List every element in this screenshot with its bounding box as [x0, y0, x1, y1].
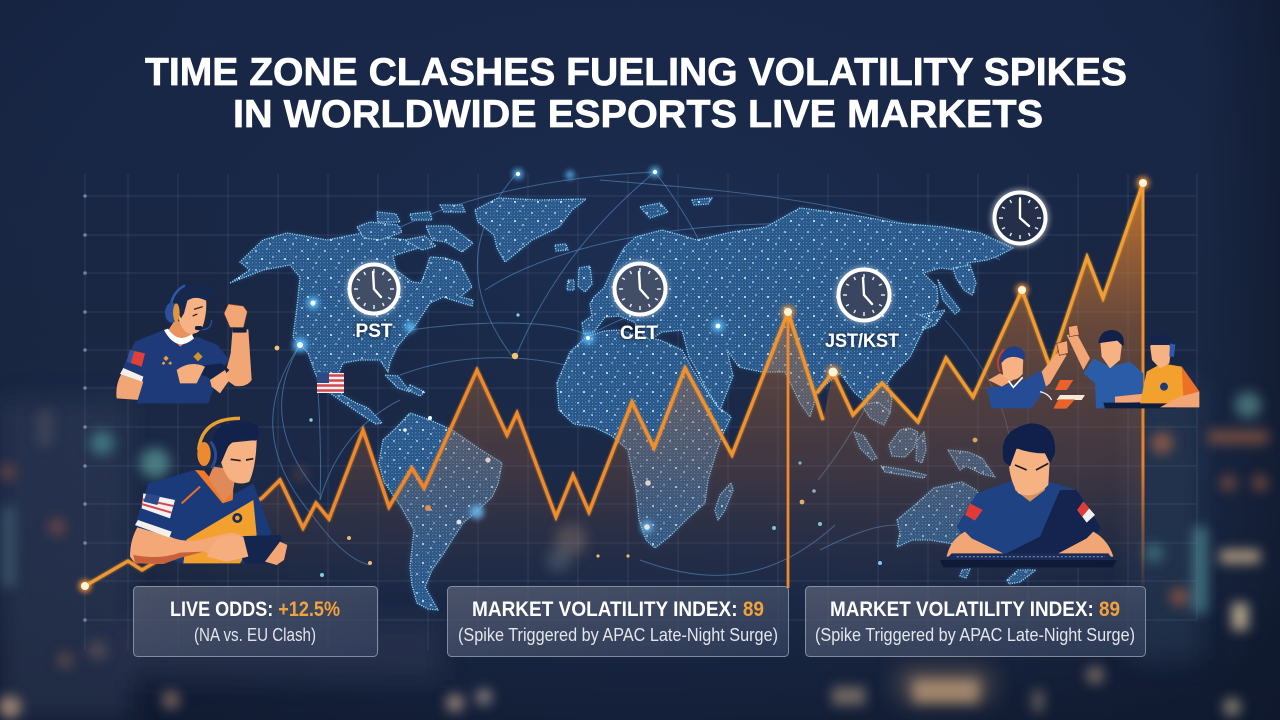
blurred city bokeh backdrop — [0, 380, 1268, 720]
live odds value: LIVE ODDS: +12.5% — [170, 598, 340, 621]
teammate centre — [1067, 325, 1178, 408]
teammate right — [1140, 334, 1199, 407]
players: celebrating team — [987, 325, 1199, 409]
orange pads between players — [1040, 380, 1085, 409]
title — [145, 51, 1127, 136]
clock: top right — [991, 189, 1049, 247]
glowing network nodes — [275, 167, 977, 577]
clock: JST/KST — [836, 267, 892, 323]
world map — [230, 198, 1036, 610]
icon: US flag on map — [317, 373, 344, 393]
glowing peak markers — [79, 177, 1149, 592]
label: CET: CET — [620, 323, 658, 344]
teammate left — [987, 341, 1068, 408]
vertical spike line: index — [787, 312, 789, 588]
index caption: (Spike Triggered by APAC Late-Night Surge) — [815, 625, 1135, 645]
player: gamer with raised fist — [116, 285, 252, 403]
network arcs — [273, 172, 1010, 575]
player: gamer with US jersey and gamepad — [130, 418, 287, 565]
index caption: (Spike Triggered by APAC Late-Night Surge) — [458, 625, 778, 645]
live odds caption: (NA vs. EU Clash) — [194, 625, 316, 645]
volatility chart — [79, 177, 1149, 592]
title: TIME ZONE CLASHES FUELING VOLATILITY SPIKES — [145, 51, 1127, 94]
clock: PST — [347, 262, 401, 316]
index value: MARKET VOLATILITY INDEX: 89 — [472, 598, 764, 621]
clock: CET — [612, 261, 668, 317]
label: PST: PST — [356, 321, 393, 342]
callout: live odds — [134, 586, 378, 656]
index value: MARKET VOLATILITY INDEX: 89 — [830, 598, 1120, 621]
callout: market volatility index (right) — [806, 586, 1146, 656]
callout: market volatility index (centre) — [448, 586, 788, 656]
vertical spike line: peak — [1142, 183, 1144, 585]
chart area fill — [85, 183, 1143, 590]
chart grid — [83, 174, 1197, 650]
volatility line — [85, 183, 1143, 586]
label: JST/KST: JST/KST — [825, 331, 899, 352]
title: IN WORLDWIDE ESPORTS LIVE MARKETS — [233, 93, 1043, 136]
player: gamer at keyboard — [940, 423, 1117, 567]
